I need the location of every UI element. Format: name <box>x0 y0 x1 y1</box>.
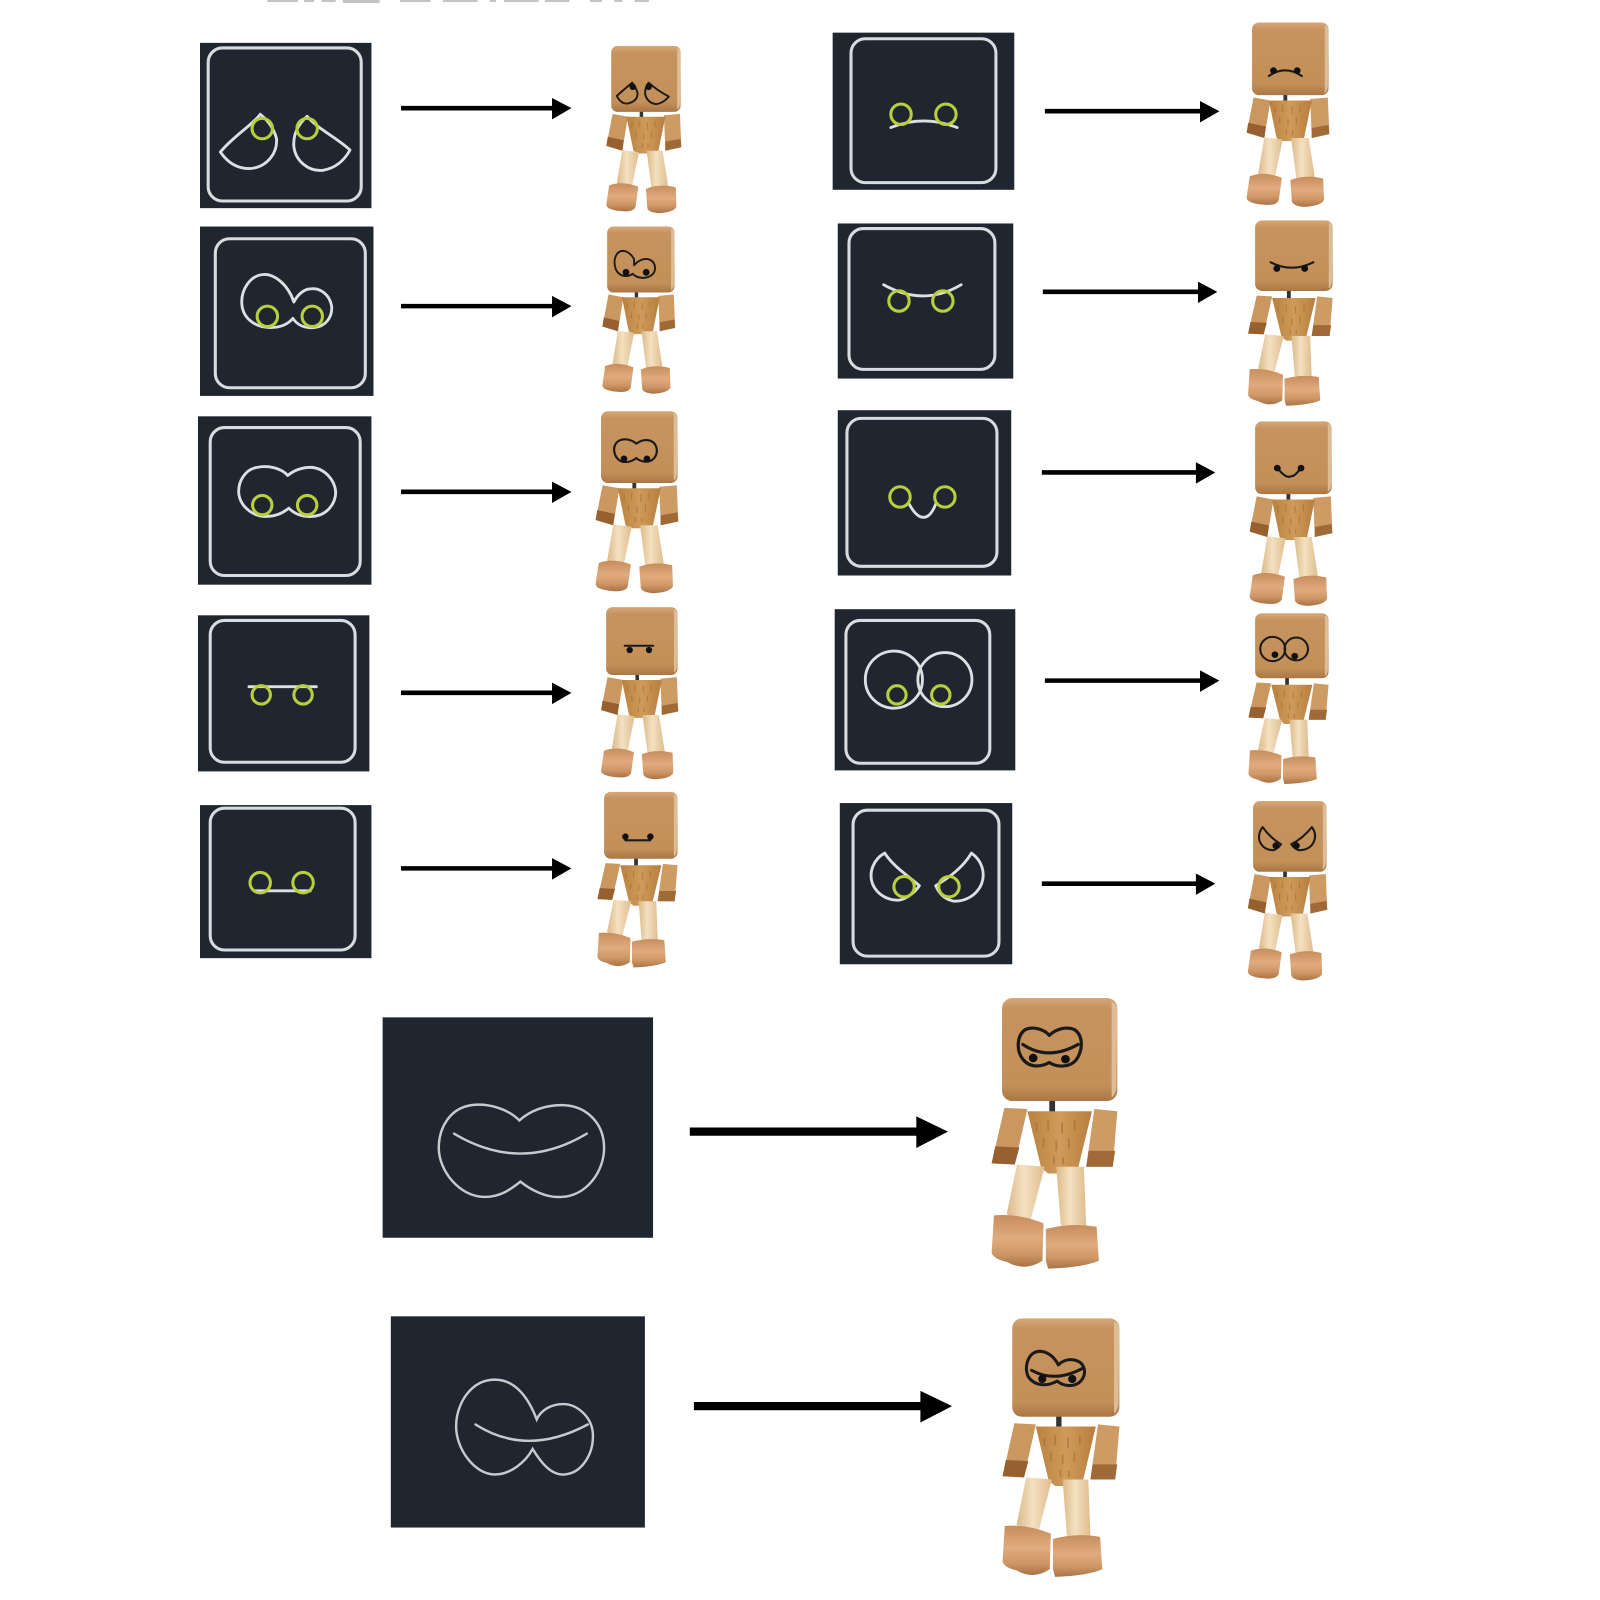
row left 3: peanut eyes <box>198 411 678 593</box>
robot: stern <box>1248 220 1333 406</box>
robot: angry <box>1248 801 1327 981</box>
row left 4: flat brow <box>198 607 678 779</box>
row left 1: sad eyes <box>200 43 681 213</box>
row right 5: angry eyes <box>840 801 1327 981</box>
robot: looking down, skewed <box>602 227 675 394</box>
panel: large skewed peanut with smile <box>391 1316 645 1528</box>
arrow <box>1045 101 1219 122</box>
panel: downward arc <box>838 223 1013 379</box>
arrow <box>1042 462 1215 484</box>
panel: smile dip <box>838 410 1011 576</box>
panel: frown <box>833 33 1014 190</box>
arrow <box>401 482 571 503</box>
robot: sad <box>606 46 681 213</box>
arrow <box>1045 670 1219 692</box>
panel: flat brow <box>198 615 369 771</box>
panel: large peanut with smile <box>383 1017 653 1238</box>
panel: round eyes <box>835 609 1015 770</box>
robot: smile <box>1250 421 1332 606</box>
arrow <box>401 858 571 880</box>
panel: sad eyes <box>200 43 371 208</box>
panel: angry eyes <box>840 803 1012 964</box>
row right 2: downward arc <box>838 220 1333 406</box>
arrow <box>690 1116 948 1148</box>
robot: calm <box>597 792 678 967</box>
robot: frown <box>1247 22 1329 207</box>
clipped caption fragment at the top edge <box>267 0 649 3</box>
robot: large, skewed smile <box>1003 1318 1119 1577</box>
row right 3: smile dip <box>838 410 1332 606</box>
row left 5: flat lower line <box>200 792 678 967</box>
robot: flat brow <box>601 607 678 779</box>
arrow <box>401 296 571 317</box>
panel: skewed peanut eyes <box>200 227 373 396</box>
large row 1: smiling peanut <box>383 998 1117 1269</box>
panel: peanut eyes <box>198 416 371 585</box>
row right 1: frown <box>833 22 1329 207</box>
arrow <box>1042 873 1215 895</box>
arrow <box>401 98 571 119</box>
arrow <box>1043 282 1217 303</box>
robot: wide eyes <box>596 411 678 593</box>
arrow <box>694 1391 952 1422</box>
large row 2: skewed peanut with smile <box>391 1316 1119 1577</box>
row left 2: skewed peanut eyes <box>200 227 675 396</box>
row right 4: round eyes <box>835 609 1329 784</box>
arrow <box>401 683 571 704</box>
panel: flat lower line <box>200 805 371 958</box>
robot: large, smiling <box>992 998 1117 1269</box>
robot: round eyes <box>1248 613 1329 784</box>
